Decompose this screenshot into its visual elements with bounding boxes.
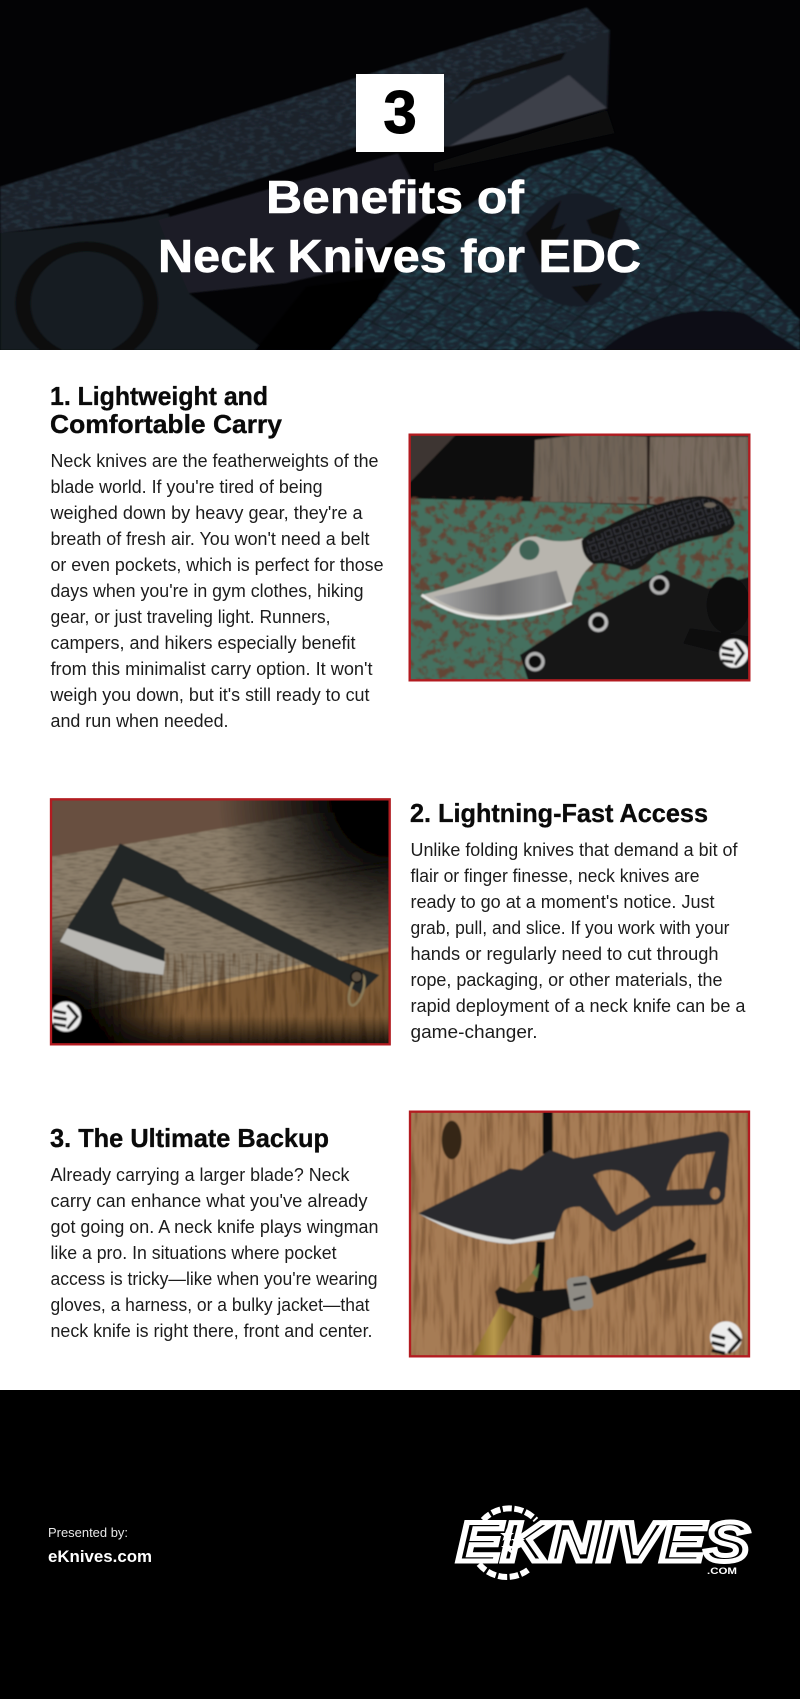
black slit — [434, 110, 615, 172]
number badge — [356, 74, 444, 152]
wood knot — [442, 1121, 462, 1159]
grip speckle — [327, 147, 800, 350]
logo dot com: .COM — [707, 1566, 737, 1576]
photo 1: knife on rusted green metal — [409, 434, 750, 681]
section 1 heading — [50, 381, 283, 439]
section 1 body text: gear, or just traveling light. Runners, — [50, 607, 330, 627]
presented by text — [48, 1525, 152, 1566]
upper wood — [52, 800, 333, 856]
section 3 body text: gloves, a harness, or a bulky jacket—that — [50, 1295, 370, 1315]
section 3 body text: access is tricky—like when you're wearing — [50, 1269, 378, 1289]
axe ring — [346, 973, 368, 1007]
knife body — [418, 1131, 729, 1244]
title — [158, 171, 641, 282]
section 2 body text — [410, 840, 746, 1042]
section 3 body text: carry can enhance what you've already — [50, 1191, 368, 1211]
section 1 body text: Neck knives are the featherweights of the — [50, 451, 378, 471]
presented by text: Presented by: — [48, 1525, 128, 1540]
paracord strands — [588, 1238, 707, 1295]
section 3 heading: 3. The Ultimate Backup — [50, 1123, 329, 1153]
slide speckle — [0, 7, 610, 233]
title: Benefits of — [266, 171, 525, 223]
photo 2: throwing axe on wood — [50, 798, 391, 1045]
knife edge — [418, 1213, 555, 1244]
badge — [710, 1321, 742, 1353]
finger hole — [519, 540, 539, 560]
logo wordmark: EKNIVES — [457, 1510, 749, 1573]
knife blade — [422, 536, 593, 619]
section 3 body text: neck knife is right there, front and center. — [50, 1321, 372, 1341]
wood planks — [533, 434, 648, 504]
pistol holster shape — [158, 153, 429, 293]
badge — [51, 1002, 81, 1032]
footer panel — [0, 1390, 800, 1699]
section 3 body text: like a pro. In situations where pocket — [50, 1243, 336, 1263]
pistol grip — [327, 147, 800, 350]
pistol frame left — [0, 213, 265, 350]
section 1 heading: Comfortable Carry — [50, 409, 283, 439]
handle — [582, 496, 735, 570]
sheath — [520, 570, 750, 681]
corner plank — [409, 434, 457, 483]
presented by text: eKnives.com — [48, 1547, 152, 1566]
section 1 body text: weigh you down, but it's still ready to cut — [50, 685, 370, 705]
trigger guard void — [255, 294, 379, 350]
section 2 body text: Unlike folding knives that demand a bit of — [410, 840, 738, 860]
section 2 body text: grab, pull, and slice. If you work with your — [410, 918, 730, 938]
section 1 body text: or even pockets, which is perfect for those — [50, 555, 384, 575]
section 1 body text: days when you're in gym clothes, hiking — [50, 581, 364, 601]
pistol slide rear — [449, 75, 607, 147]
section 2 heading: 2. Lightning-Fast Access — [410, 798, 708, 828]
logo stars — [500, 1528, 525, 1554]
vignette corners — [226, 800, 388, 964]
weathered planks — [50, 810, 391, 1010]
section 1 body text — [49, 451, 383, 731]
section 2 body text: rope, packaging, or other materials, the — [410, 970, 722, 990]
section 2 body text: flair or finger finesse, neck knives are — [410, 866, 700, 886]
badge — [720, 639, 748, 668]
section 2 body text: hands or regularly need to cut through — [410, 944, 718, 964]
section 2 body text: ready to go at a moment's notice. Just — [410, 892, 714, 912]
section 1 body text: blade world. If you're tired of being — [50, 477, 322, 497]
rivets — [651, 577, 667, 593]
plank gap — [543, 1111, 553, 1154]
section 1 body text: breath of fresh air. You won't need a belt — [50, 529, 370, 549]
green rusted metal — [409, 498, 750, 681]
header panel with pistol photo — [0, 0, 800, 360]
axe edge — [60, 928, 165, 975]
lower wood — [88, 954, 388, 1043]
section 1 body text: from this minimalist carry option. It won't — [50, 659, 372, 679]
plank gaps — [52, 862, 388, 918]
photo 3: skeleton neck knife on wood — [409, 1111, 750, 1357]
section 2 body text: game-changer. — [410, 1022, 538, 1042]
bullet — [515, 1263, 539, 1296]
pistol slide — [0, 7, 610, 233]
title: Neck Knives for EDC — [158, 230, 641, 282]
number badge: 3 — [383, 79, 417, 146]
section 1 body text: campers, and hikers especially benefit — [50, 633, 356, 653]
section 2 body text: rapid deployment of a neck knife can be a — [410, 996, 746, 1016]
section 1 body text: weighed down by heavy gear, they're a — [49, 503, 363, 523]
section 1 body text: and run when needed. — [50, 711, 228, 731]
section 3 body text — [50, 1165, 378, 1341]
paracord loop — [495, 1287, 572, 1319]
grip texture — [327, 147, 800, 350]
hollow grind — [433, 571, 567, 615]
logo gear — [479, 1508, 536, 1577]
eKnives logo — [457, 1508, 749, 1577]
axe — [60, 843, 379, 994]
section 3 body text: got going on. A neck knife plays wingman — [50, 1217, 378, 1237]
bead — [566, 1275, 594, 1311]
grip disk — [519, 193, 634, 307]
section 3 body text: Already carrying a larger blade? Neck — [50, 1165, 350, 1185]
section 1 heading: 1. Lightweight and — [50, 381, 268, 411]
blade edge — [422, 595, 572, 618]
